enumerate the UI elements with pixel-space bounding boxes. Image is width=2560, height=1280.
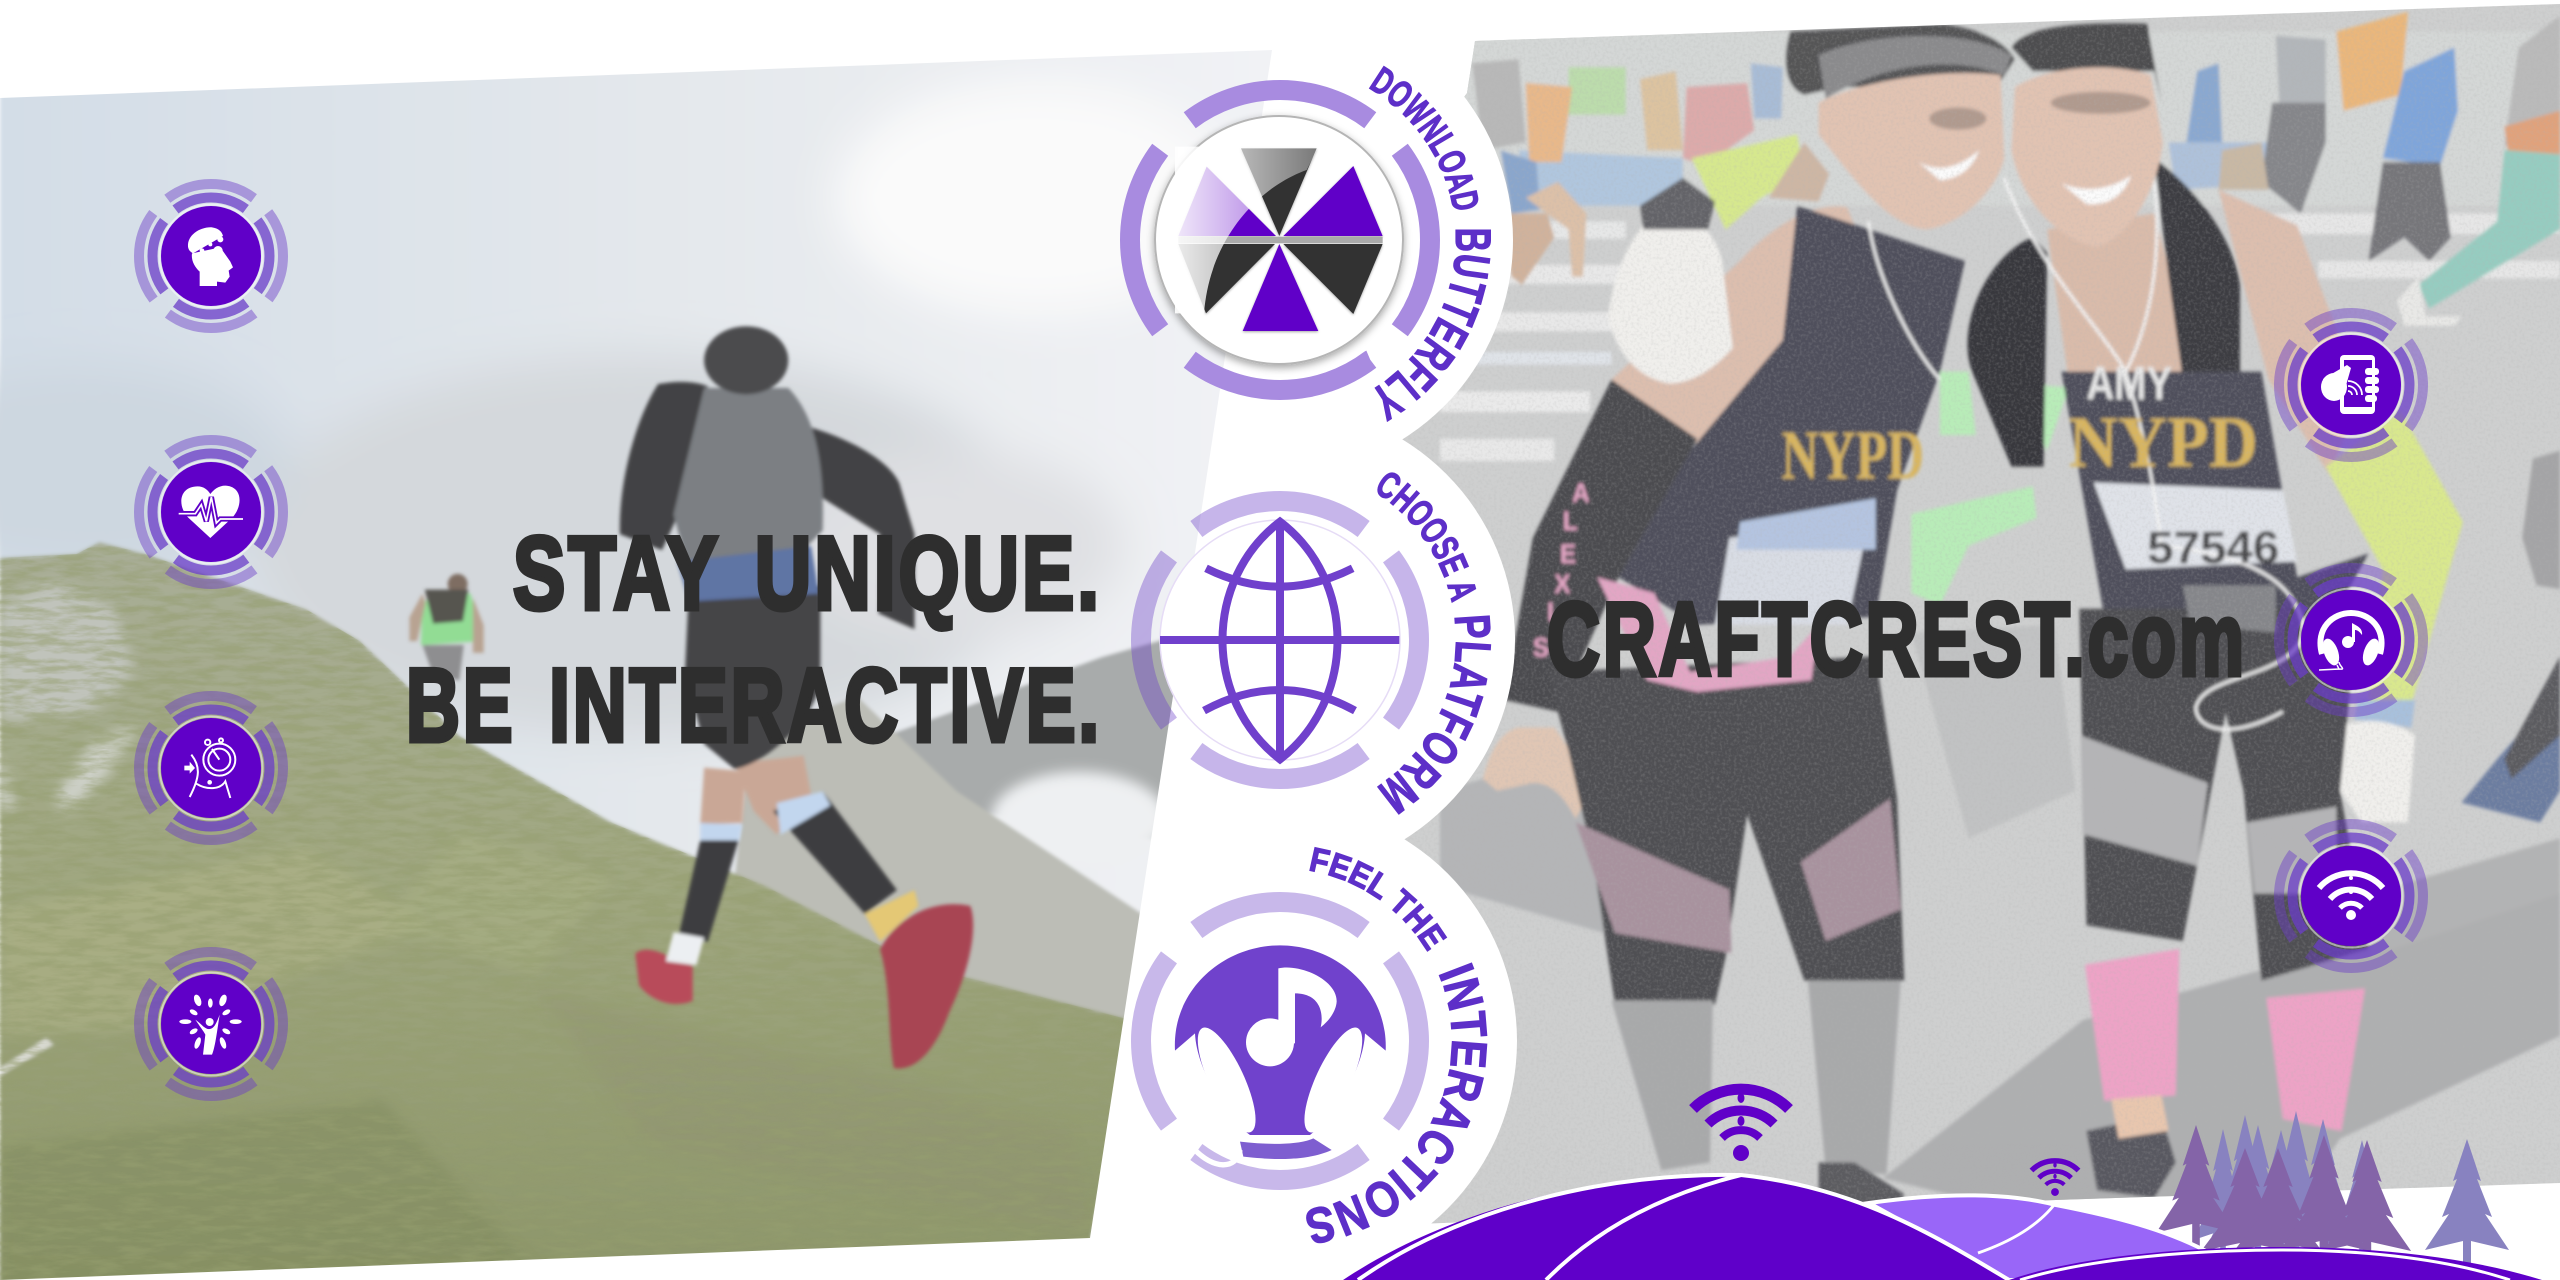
- ring: interactions: [1085, 846, 1475, 1236]
- left woman: X: [1554, 570, 1570, 599]
- jersey lettering: AMY: [2086, 356, 2172, 410]
- label: download butterfly: [1362, 60, 1501, 430]
- crowd background: [1440, 12, 2560, 822]
- jersey lettering: NYPD: [2069, 402, 2258, 482]
- panel: feel the interactions: [1085, 841, 1497, 1255]
- hill: light middle: [1869, 1195, 2204, 1280]
- icon: wifi: [2250, 795, 2452, 997]
- road shadows: [1883, 886, 2560, 1210]
- hills: [1340, 1175, 2542, 1280]
- heading: stay unique: STAY UNIQUE.: [513, 516, 1102, 632]
- heading: be interactive: BE INTERACTIVE.: [406, 648, 1102, 764]
- disc: butterfly: [1155, 116, 1403, 364]
- disc: platform: [1160, 520, 1400, 760]
- left woman: A: [1572, 479, 1590, 508]
- icon: heart with pulse: [110, 411, 312, 613]
- icon: person tree: [110, 923, 312, 1125]
- mountain slope: [0, 542, 1133, 1280]
- trees: [2156, 1111, 2509, 1270]
- heading: brand url: CRAFTCREST.com: [1547, 582, 2247, 698]
- icon: head with gears: [110, 155, 312, 357]
- left woman: I: [1547, 598, 1554, 627]
- jersey lettering: [1781, 356, 2279, 574]
- label: download butterfly: DOWNLOAD: [1368, 66, 1478, 210]
- jersey lettering: 57546: [2147, 522, 2279, 574]
- icon group: left column: [110, 155, 312, 1125]
- photo: marathon runners: [1390, 0, 2560, 1240]
- panel: download butterfly: [1070, 30, 1501, 450]
- left woman: S: [1533, 633, 1549, 663]
- left woman: L: [1563, 507, 1578, 536]
- icon: small wifi signal: [2031, 1161, 2079, 1196]
- panel: choose a platform: [1085, 445, 1501, 835]
- ring: butterfly: [1070, 30, 1490, 450]
- right woman: [1869, 23, 2463, 1198]
- icon: headphones with note: [2250, 539, 2452, 741]
- jersey lettering: NYPD: [1781, 418, 1924, 494]
- label: choose a platform: [1368, 463, 1501, 824]
- label: feel the interactions: FEEL THE: [1309, 846, 1448, 952]
- icon group: right column: [2250, 284, 2452, 997]
- icon: stopwatch and waist: [110, 667, 312, 869]
- label: feel the interactions: INTERACTIONS: [1306, 962, 1488, 1244]
- left woman: E: [1560, 540, 1576, 569]
- hill: right: [2009, 1247, 2542, 1280]
- icon: large wifi signal: [1693, 1089, 1789, 1161]
- left woman: [1483, 24, 2015, 1210]
- label: download butterfly: BUTTERFLY: [1374, 230, 1491, 422]
- icon: butterfly logo: [1175, 147, 1383, 331]
- label: choose a platform: CHOOSE A: [1377, 472, 1476, 603]
- icon: phone in hand: [2250, 284, 2452, 486]
- label: choose a platform: PLATFORM: [1377, 615, 1492, 815]
- icon: music headphones: [1175, 945, 1386, 1165]
- main runner: [620, 326, 973, 1068]
- small runner in green: [409, 574, 484, 681]
- hill: main: [1340, 1175, 2009, 1280]
- icon: globe: [1160, 522, 1399, 759]
- photo: mountain trail runner: [0, 40, 1301, 1280]
- ring: platform: [1085, 445, 1475, 835]
- white circle panels: [1043, 5, 1517, 1278]
- green sleeve of bystander: [1911, 486, 2036, 605]
